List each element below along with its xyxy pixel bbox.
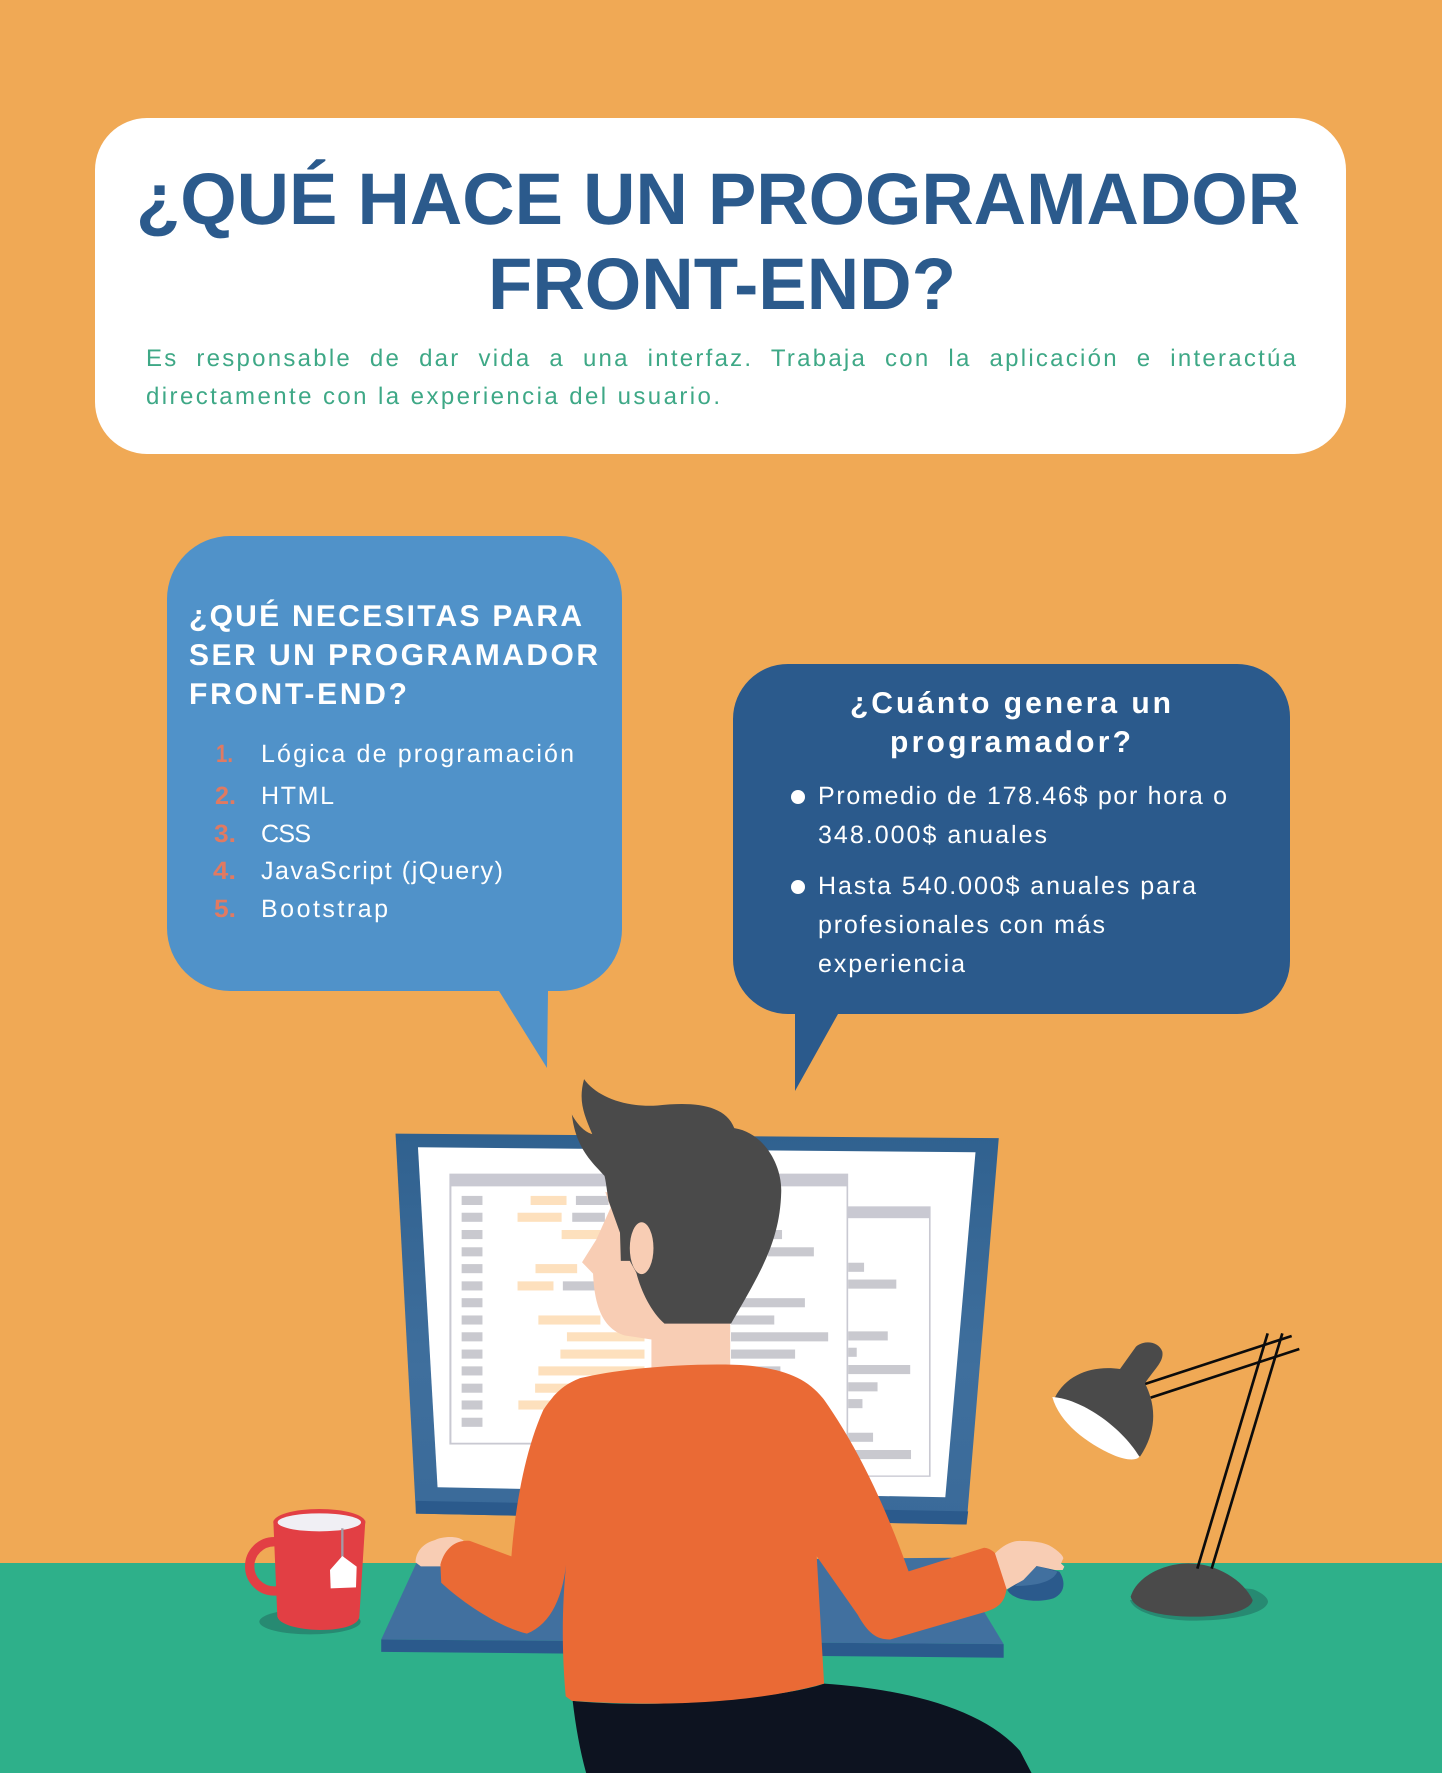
salary heading [850,687,1171,759]
salary bullet two: experiencia [818,950,965,978]
requirements heading: ¿QUÉ NECESITAS PARA [189,599,582,633]
left hand [416,1537,464,1566]
requirements list: Lógica de programación [261,740,574,768]
panel: title card [95,118,1346,454]
title [136,159,1300,325]
panel: salary speech bubble [733,664,1290,1091]
trousers [573,1684,1033,1773]
title: ¿QUÉ HACE UN PROGRAMADOR [136,159,1300,240]
requirements list: 4. [213,857,236,885]
requirements list: CSS [261,820,311,848]
salary heading: ¿Cuánto genera un [850,687,1171,720]
illustration: computer monitor [396,1134,999,1525]
panel: requirements speech bubble [167,536,622,1068]
salary bullet one [791,782,1227,849]
requirements list: 2. [215,782,236,810]
requirements heading: SER UN PROGRAMADOR [189,639,598,672]
subtitle text [146,345,1297,410]
right hand [995,1541,1064,1589]
requirements list: 1. [216,740,233,768]
salary bullet two: profesionales con más [818,911,1105,939]
face and neck [582,1192,730,1374]
orange sweater [440,1364,1007,1704]
requirements list: HTML [261,782,334,810]
requirements heading: FRONT-END? [189,678,407,711]
requirements list [213,740,574,923]
desk [0,1563,1442,1773]
hair [572,1079,781,1324]
salary heading: programador? [890,726,1131,759]
salary bullet two [791,872,1196,978]
salary bullet one: Promedio de 178.46$ por hora o [818,782,1227,810]
icon: red mug with tea bag [250,1509,365,1634]
code window back [829,1206,931,1477]
subtitle text: directamente con la experiencia del usuario. [146,383,720,410]
requirements list: 3. [214,820,236,848]
illustration: programmer [416,1079,1033,1773]
mouse [1007,1565,1063,1601]
requirements heading [189,599,598,711]
subtitle text: Es responsable de dar vida a una interfaz. Trabaja con la aplicación e interactúa [146,345,1297,372]
ear [630,1222,653,1274]
icon: desk lamp [1052,1333,1299,1621]
illustration: mouse and right hand [995,1541,1064,1601]
requirements list: 5. [214,895,236,923]
requirements list: Bootstrap [261,895,388,923]
requirements list: JavaScript (jQuery) [261,857,503,885]
salary bullet one: 348.000$ anuales [818,821,1047,849]
illustration: keyboard [381,1558,1004,1658]
title: FRONT-END? [488,244,956,325]
code window front [449,1174,848,1445]
salary bullet two: Hasta 540.000$ anuales para [818,872,1196,900]
